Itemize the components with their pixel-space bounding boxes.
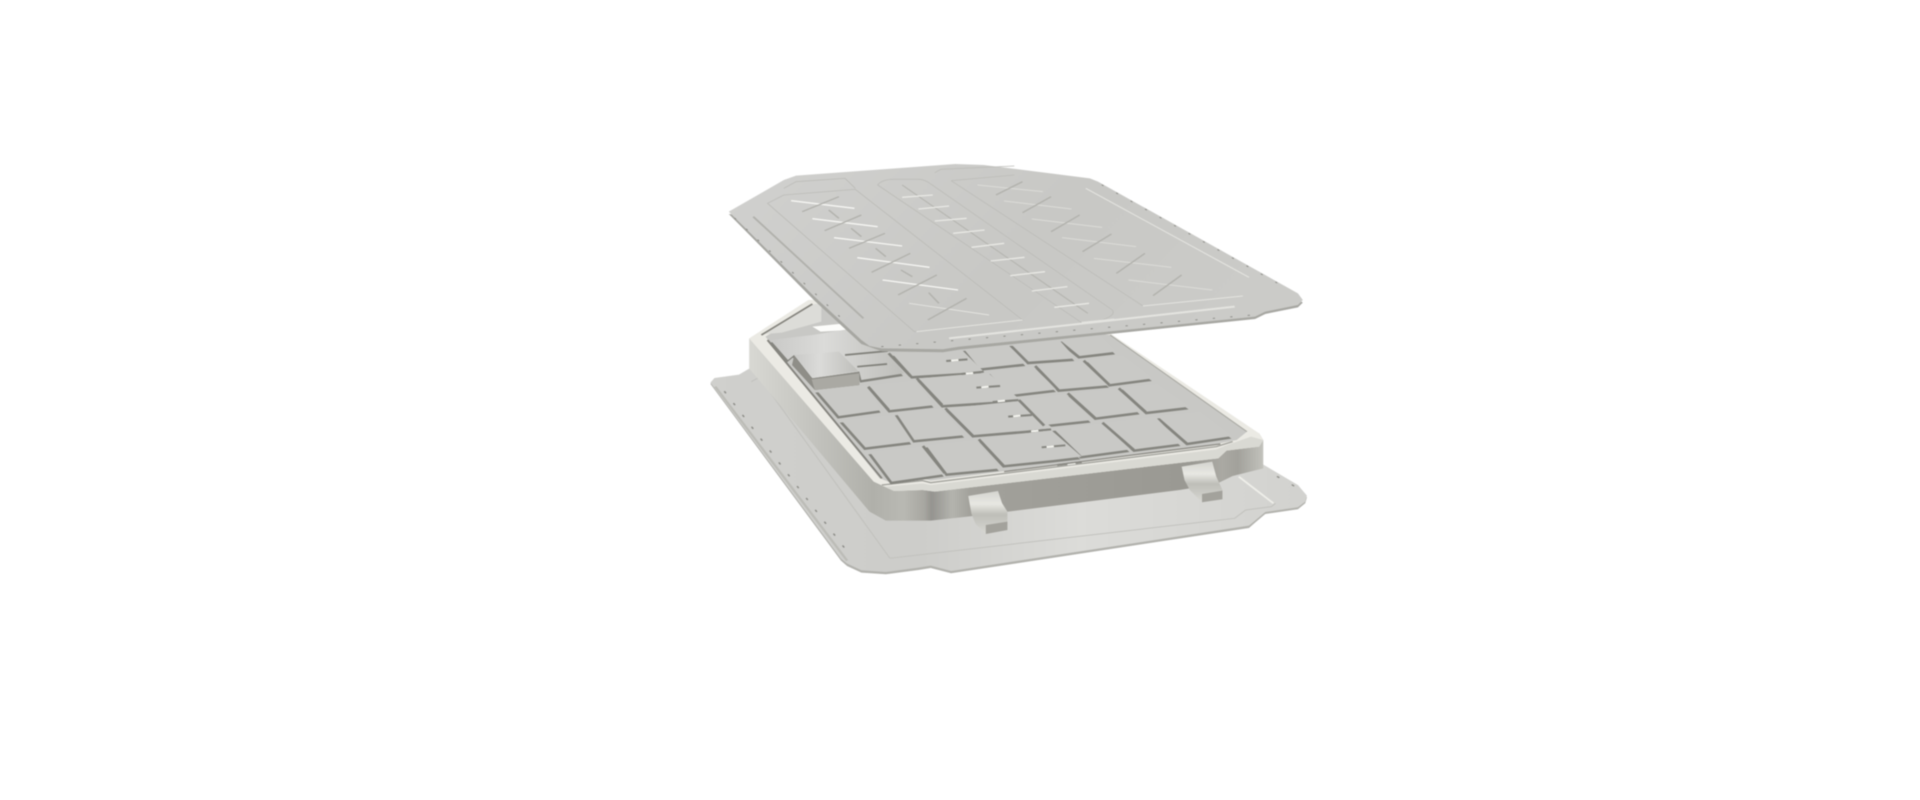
centre ribs [902, 185, 1088, 313]
left cross ribs [791, 201, 989, 315]
top cover plate [729, 164, 1303, 352]
bus bar slots [946, 359, 1220, 472]
tray floor [765, 306, 1247, 484]
cell modules [769, 332, 1231, 484]
mounting bracket left [968, 491, 1007, 534]
bottom cover plate [710, 369, 1307, 574]
right cross ribs [978, 185, 1212, 290]
mounting bracket right [1182, 462, 1222, 502]
battery tray [749, 299, 1263, 521]
highlight lines [916, 188, 1249, 338]
tray rim [749, 299, 1263, 492]
tray outer wall [749, 338, 1263, 521]
raised module block [792, 351, 888, 390]
panel outlines [768, 166, 1143, 332]
cell grooves [868, 353, 1145, 473]
edge rivets [735, 185, 1290, 347]
